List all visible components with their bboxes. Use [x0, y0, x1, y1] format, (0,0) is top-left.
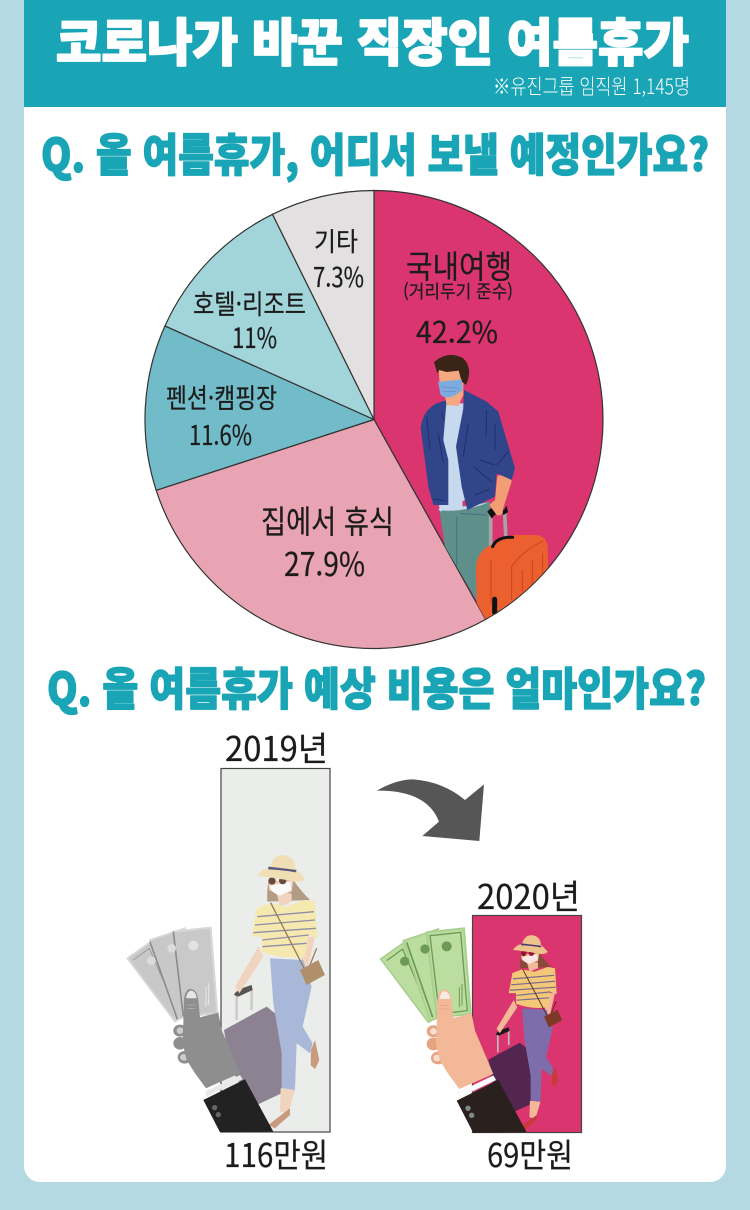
label: 2019: 2019년 — [225, 722, 328, 771]
pie label: rest at home: 집에서 휴식 — [261, 497, 394, 543]
arrow: decrease from 2019 to 2020 — [377, 779, 484, 841]
pie label: domestic travel — [403, 242, 513, 352]
icon: grey hand holding banknotes — [127, 928, 273, 1132]
illustration: faded woman traveller 2019 — [224, 855, 325, 1128]
illustration: woman traveller 2020 — [489, 935, 562, 1129]
pie slice: pension and camping 11.6% — [145, 326, 374, 490]
pie slice: hotel and resort 11% — [165, 214, 374, 420]
pie label: other: 기타 — [314, 222, 358, 259]
pie chart: summer vacation destinations — [145, 190, 603, 649]
pie label: domestic travel: (거리두기 준수) — [403, 278, 513, 304]
pie label: other — [313, 222, 364, 295]
pie label: hotel and resort — [193, 283, 306, 357]
pie label: pension and camping: 펜션·캠핑장 — [166, 377, 277, 416]
title: 코로나가 바꾼 직장인 여름휴가 — [56, 2, 689, 76]
pie label: pension and camping: 11.6% — [189, 414, 252, 453]
bar: 2020 cost — [472, 916, 582, 1132]
label: 2020 cost: 69만원 — [487, 1129, 573, 1177]
pie slice: domestic travel 42.2% — [374, 190, 603, 619]
pie label: other: 7.3% — [313, 256, 364, 295]
pie label: pension and camping — [166, 377, 277, 453]
label: 2020: 2020년 — [477, 870, 580, 919]
bar: 2019 cost — [221, 768, 330, 1132]
pie label: domestic travel: 42.2% — [416, 308, 498, 352]
icon: hand holding green banknotes — [381, 928, 527, 1133]
pie label: hotel and resort: 11% — [232, 317, 277, 357]
pie label: hotel and resort: 호텔·리조트 — [193, 283, 306, 322]
pie label: domestic travel: 국내여행 — [406, 242, 512, 288]
pie slice: other 7.3% — [272, 190, 374, 420]
pie label: rest at home: 27.9% — [284, 538, 365, 586]
pie label: rest at home — [261, 497, 394, 586]
panel: header band — [24, 0, 726, 107]
illustration: man with mask and orange suitcase — [421, 355, 549, 640]
pie slice: rest at home 27.9% — [156, 420, 486, 649]
label: 2019 cost: 116만원 — [224, 1129, 328, 1177]
subtitle: sample size: ※유진그룹 임직원 1,145명 — [493, 71, 690, 101]
